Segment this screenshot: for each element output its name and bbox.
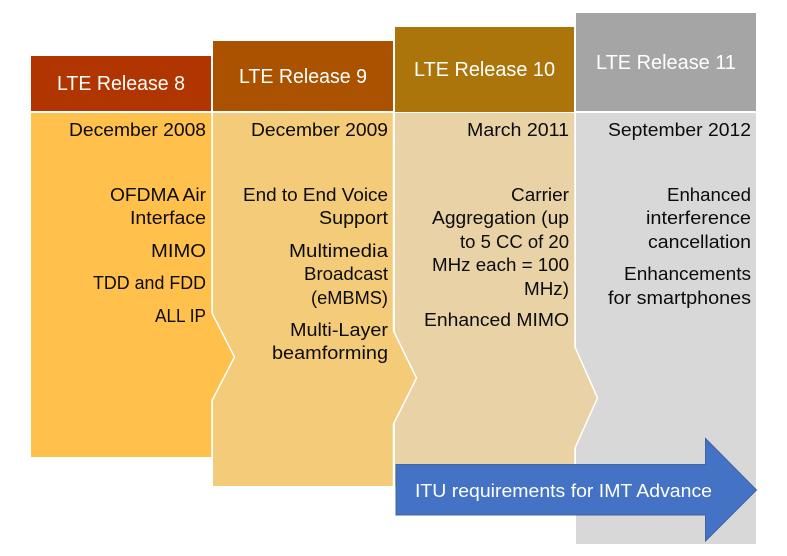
arrow: ITU requirements for IMT Advance [396, 438, 756, 541]
text: Release 8 features: Interface [130, 208, 206, 228]
text: Release 9 features: (eMBMS) [311, 288, 388, 308]
text: Release 10 features: Enhanced MIMO [424, 310, 569, 330]
Release 11 date: September 2012 [608, 120, 751, 140]
Release 10 date: March 2011 [467, 120, 569, 140]
text: Release 8 features: MIMO [151, 241, 206, 261]
header: LTE Release 10: LTE Release 10 [414, 58, 555, 81]
Release 9 date: December 2009 [251, 120, 388, 140]
text: Release 8 features: TDD and FDD [93, 273, 206, 293]
text: Release 11 features: Enhancements [624, 264, 751, 284]
text: Release 10 features: MHz each = 100 [432, 255, 569, 275]
panel: LTE Release 8 body [31, 113, 234, 457]
text: Release 9 features [243, 185, 389, 363]
header: LTE Release 9: LTE Release 9 [239, 65, 367, 88]
text: Release 8 features: OFDMA Air [110, 185, 206, 205]
text: Release 10 features: Aggregation (up [432, 208, 569, 228]
text: Release 11 features: Enhanced [667, 185, 751, 205]
text: Release 11 features: interference [646, 208, 751, 228]
text: Release 10 features: Carrier [511, 185, 569, 205]
header: LTE Release 8: LTE Release 8 [57, 72, 185, 95]
header: LTE Release 8 [31, 56, 211, 111]
header: LTE Release 11 [576, 13, 756, 111]
text: Release 8 features [93, 185, 206, 326]
header: LTE Release 11: LTE Release 11 [596, 51, 736, 74]
text: Release 9 features: Broadcast [304, 264, 388, 284]
text: Release 9 features: Multi-Layer [290, 320, 388, 340]
text: Release 11 features [608, 185, 751, 308]
text: Release 10 features [424, 185, 569, 330]
text: Release 8 features: ALL IP [155, 306, 206, 326]
text: Release 9 features: Support [319, 208, 388, 228]
header: LTE Release 9 [213, 41, 393, 111]
white mask below Release 10 [394, 486, 576, 546]
text: Release 11 features: for smartphones [608, 288, 751, 308]
arrow: ITU requirements for IMT Advance: ITU requirements for IMT Advance [415, 481, 712, 501]
header: LTE Release 10 [395, 27, 574, 112]
panel: LTE Release 11 body [576, 113, 756, 544]
text: Release 9 features: Multimedia [289, 241, 389, 261]
Release 8 date: December 2008 [69, 120, 206, 140]
panel: LTE Release 10 body [395, 113, 598, 520]
text: Release 10 features: MHz) [524, 279, 569, 299]
text: Release 11 features: cancellation [648, 232, 751, 252]
text: Release 9 features: End to End Voice [243, 185, 388, 205]
text: Release 9 features: beamforming [272, 343, 388, 363]
panel: LTE Release 9 body [213, 113, 416, 486]
text: Release 10 features: to 5 CC of 20 [460, 232, 569, 252]
